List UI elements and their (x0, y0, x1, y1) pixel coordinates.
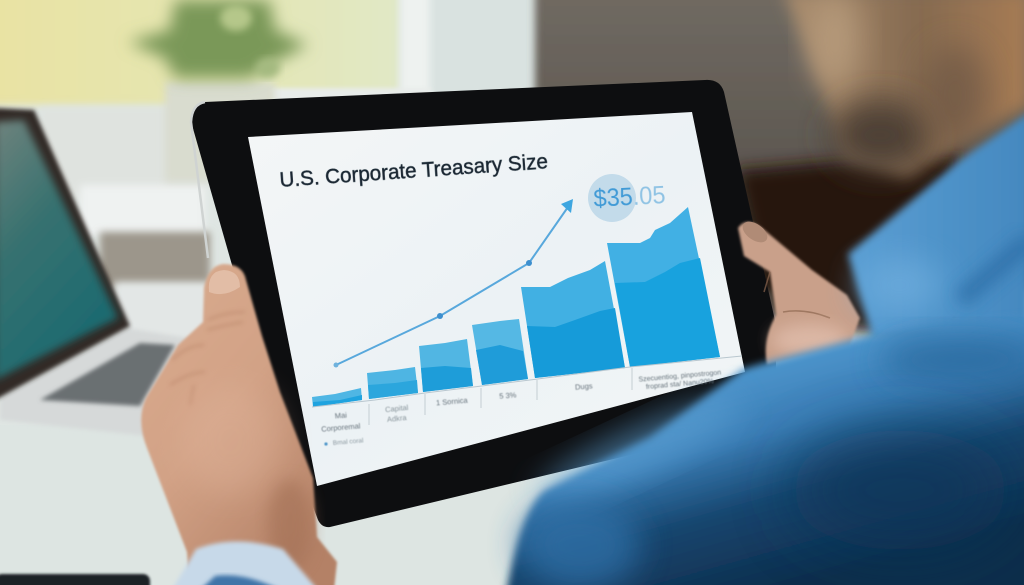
axis labels: 5 3% (499, 390, 517, 401)
stacked area bars (312, 207, 720, 407)
axis labels: Capital (385, 403, 409, 414)
right hand fingers behind tablet (738, 217, 860, 365)
value badge (588, 174, 666, 222)
shirt shoulder, blurred (505, 315, 1024, 585)
axis line and ticks (312, 356, 742, 425)
chart title: U.S. Corporate Treasary Size (279, 150, 549, 192)
bar 5 (521, 261, 625, 378)
legend: Bmal coral (333, 437, 364, 447)
axis labels: froprad sta/ Nanu20% (646, 378, 714, 391)
thumbnail (209, 270, 240, 294)
axis labels (321, 369, 722, 434)
bar 2 (367, 367, 418, 399)
tablet body (191, 80, 776, 527)
bar 6 (607, 207, 720, 367)
bar 1 (312, 388, 362, 407)
axis labels: Dugs (575, 381, 593, 392)
shirt collar, blurred (848, 112, 1024, 340)
shirt cuff (172, 542, 318, 585)
laptop, blurred (0, 108, 200, 436)
axis labels: Adkra (387, 413, 408, 424)
axis labels: Mai (334, 410, 348, 421)
screen surface (248, 112, 745, 486)
man's blurred face and neck (783, 0, 1024, 178)
axis labels: 1 Sornica (436, 396, 469, 407)
bar 4 (472, 319, 528, 385)
bar 3 (419, 339, 473, 392)
growth line with arrow (334, 199, 573, 368)
axis labels: Corporemal (321, 421, 361, 434)
tablet screen with chart (248, 112, 745, 486)
phone at bottom left (0, 574, 150, 585)
axis labels: Szecuentiog, pinpostrogon (638, 369, 722, 384)
left hand holding tablet (141, 264, 337, 585)
plant and pot on the window sill (128, 0, 308, 182)
value badge: $35.05 (593, 181, 666, 213)
